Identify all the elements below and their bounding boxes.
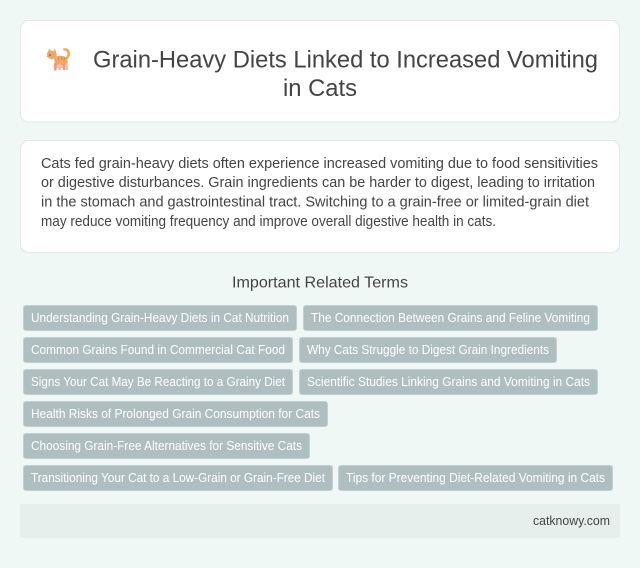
title text [93,46,598,102]
tag: Choosing Grain-Free Alternatives for Sensitive Cats [31,439,302,453]
tag: The Connection Between Grains and Feline Vomiting [311,311,590,325]
tag [338,466,612,490]
heading: related terms: Important Related Terms [232,274,408,292]
tag [24,338,292,362]
tag [24,370,292,394]
title text: in Cats [283,75,357,102]
tag: Health Risks of Prolonged Grain Consumption for Cats [31,407,320,421]
tag list [24,306,612,490]
tag: Signs Your Cat May Be Reacting to a Grainy Diet [31,375,285,389]
title text: Grain-Heavy Diets Linked to Increased Vomiting [93,46,598,74]
tag [24,306,296,330]
tag: Transitioning Your Cat to a Low-Grain or Grain-Free Diet [31,471,325,485]
description text: may reduce vomiting frequency and improve overall digestive health in cats. [41,213,496,230]
tag [24,466,332,490]
tag [24,402,328,426]
footer bar: catknowy.com [533,514,610,528]
tag [304,306,598,330]
tag: Common Grains Found in Commercial Cat Food [31,343,285,357]
tag: Scientific Studies Linking Grains and Vomiting in Cats [307,375,590,389]
description text: in the stomach and gastrointestinal tract. Switching to a grain-free or limited-grain diet [41,194,590,210]
description text: Cats fed grain-heavy diets often experience increased vomiting due to food sensitivities [41,155,598,172]
tag [300,338,556,362]
tag [24,434,310,458]
description text [41,155,598,230]
tag: Understanding Grain-Heavy Diets in Cat Nutrition [31,311,289,325]
tag: Why Cats Struggle to Digest Grain Ingredients [307,343,549,357]
tag [300,370,598,394]
description text: or digestive disturbances. Grain ingredients can be harder to digest, leading to irritation [41,174,595,191]
footer bar [20,504,620,538]
icon: cat [47,48,70,70]
tag: Tips for Preventing Diet-Related Vomiting in Cats [346,471,605,485]
panel: title card [20,20,620,122]
panel: description card [20,140,620,252]
